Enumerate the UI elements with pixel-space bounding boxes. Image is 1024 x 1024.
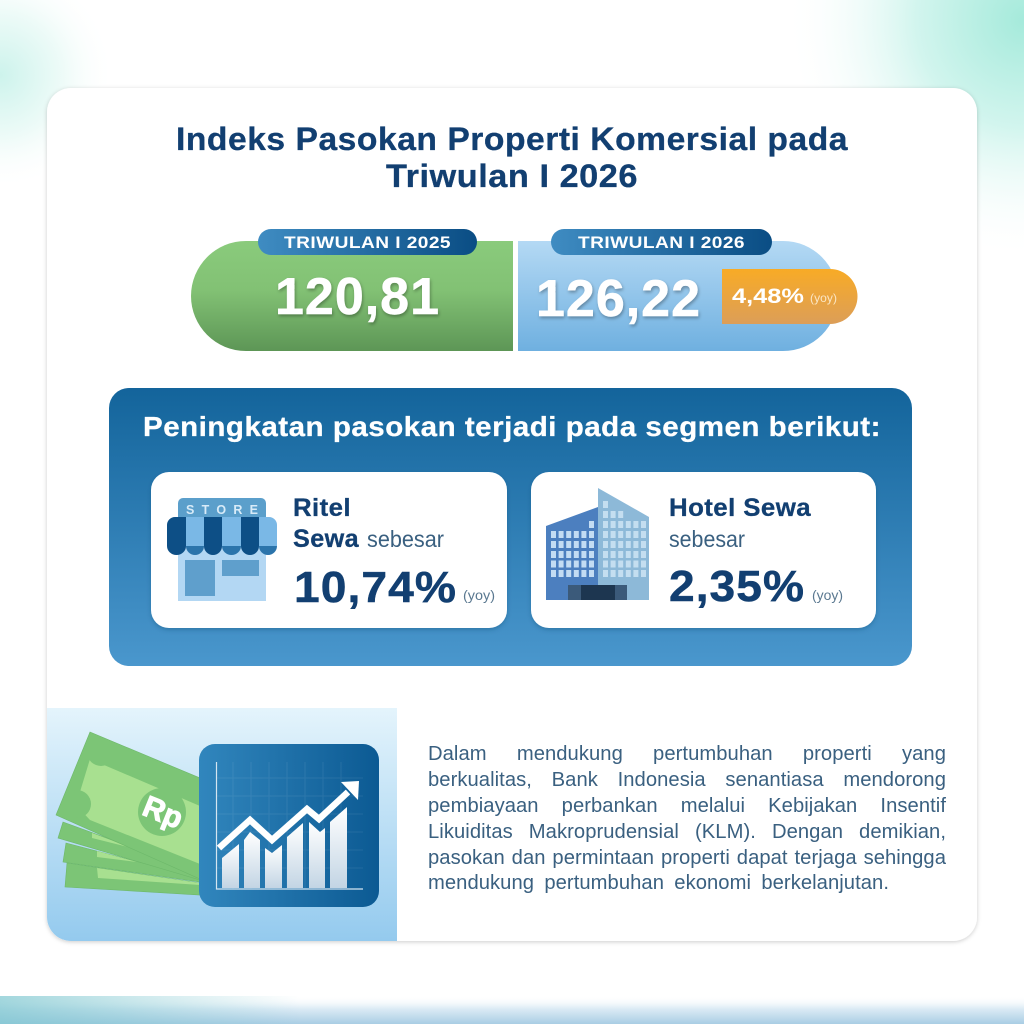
value 120,81: 120,81 (275, 268, 440, 326)
card: Hotel Sewa (531, 472, 876, 628)
badge: Triwulan I 2026 (551, 229, 772, 255)
icon: store (167, 498, 277, 601)
icon: rupiah banknotes (56, 732, 200, 895)
label: Ritel Sewa sebesar: sebesar (367, 526, 444, 552)
text block: explanation paragraph: berkualitas, Bank Indonesia senantiasa mendorong (428, 769, 946, 791)
title: Indeks Pasokan Properti Komersial pada (176, 121, 848, 157)
panel: comparison Triwulan I 2026 (518, 229, 858, 351)
card: Ritel Sewa (151, 472, 507, 628)
badge: Triwulan I 2025: TRIWULAN I 2025 (284, 233, 451, 252)
badge: Triwulan I 2026: TRIWULAN I 2026 (578, 233, 745, 252)
title: Triwulan I 2026 (386, 158, 638, 194)
label: Hotel Sewa sebesar (669, 494, 812, 552)
icon: hotel building (546, 488, 649, 600)
text block: explanation paragraph: pembiayaan perbankan melalui Kebijakan Insentif (428, 795, 946, 817)
value 10,74%: (yoy) (463, 588, 495, 603)
panel: segments (109, 388, 912, 666)
label: Hotel Sewa sebesar: sebesar (669, 526, 745, 552)
label: Ritel Sewa sebesar: Ritel (293, 494, 351, 522)
text block: explanation paragraph: Dalam mendukung pertumbuhan properti yang (428, 743, 946, 765)
heading: segments: Peningkatan pasokan terjadi pada segmen berikut: (143, 411, 881, 442)
callout: growth 4,48% (722, 269, 858, 324)
callout: growth 4,48%: 4,48% (732, 285, 804, 308)
callout: growth 4,48%: (yoy) (810, 291, 837, 305)
text block: explanation paragraph: mendukung pertumbuhan ekonomi berkelanjutan. (428, 872, 889, 894)
label: Ritel Sewa sebesar: Sewa (293, 525, 360, 553)
value 2,35%: (yoy) (812, 588, 843, 603)
label: Hotel Sewa sebesar: Hotel Sewa (669, 494, 812, 522)
text block: explanation paragraph: pasokan dan permintaan properti dapat terjaga sehingga (428, 847, 946, 869)
label: Ritel Sewa sebesar (293, 494, 444, 553)
panel: main white card (47, 88, 977, 941)
value 126,22: 126,22 (536, 270, 701, 328)
value 10,74%: 10,74% (294, 563, 457, 612)
badge: Triwulan I 2025 (258, 229, 477, 255)
icon: Rp coin: Rp (138, 790, 187, 836)
panel: illustration (47, 708, 397, 941)
text block: explanation paragraph: Likuiditas Makroprudensial (KLM). Dengan demikian, (428, 821, 946, 843)
value 2,35%: 2,35% (669, 562, 805, 611)
title (176, 121, 848, 194)
icon: growth chart tile (199, 744, 379, 907)
text block: explanation paragraph (428, 743, 946, 894)
panel: comparison Triwulan I 2025 (191, 229, 513, 351)
icon: store: STORE (186, 503, 258, 517)
